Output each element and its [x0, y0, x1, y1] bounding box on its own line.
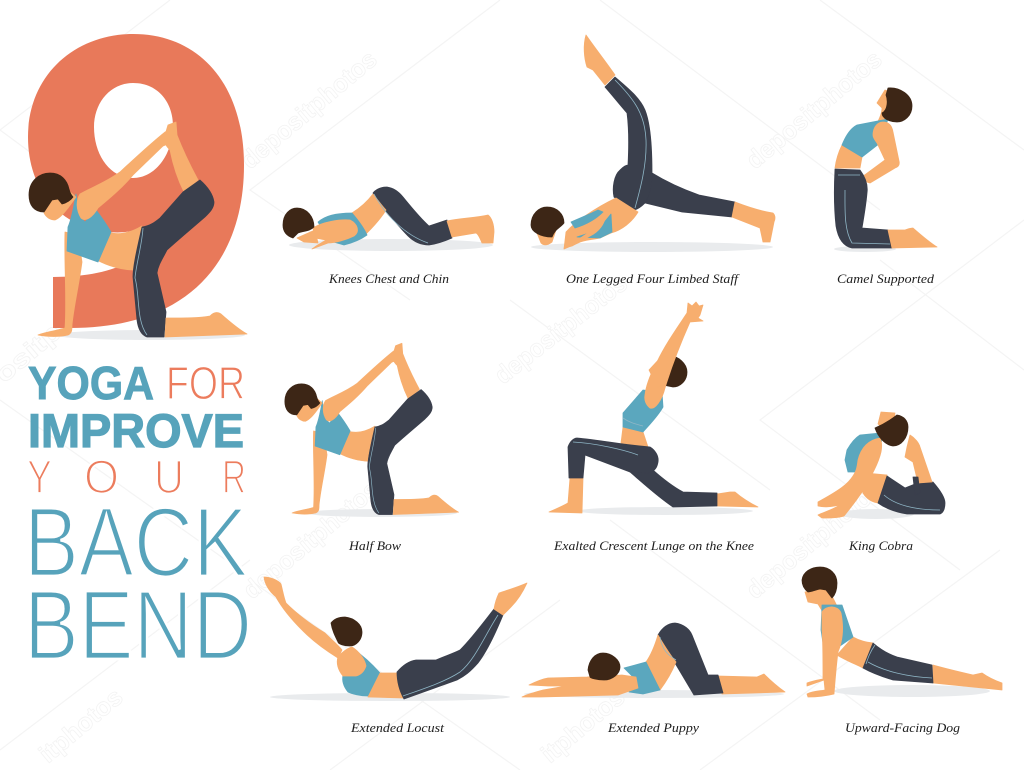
watermark text: depositphotos [489, 269, 633, 390]
pose: half bow [285, 343, 459, 517]
watermark text: depositphotos [236, 45, 383, 175]
pose: extended locust [264, 577, 527, 735]
title line: FOR: FOR [166, 357, 245, 409]
watermark text: itphotos [34, 683, 128, 769]
caption: half bow: Half Bow [348, 539, 402, 553]
watermark text: depositphotos [741, 475, 888, 605]
watermark text: depositphotos [741, 45, 888, 175]
pose: upward-facing dog [802, 567, 1002, 735]
caption: Camel Supported [837, 272, 935, 286]
title line: YOUR: O [84, 450, 119, 503]
title line: BEND: BEND [24, 570, 252, 680]
pose: knees chest and chin [283, 187, 494, 286]
pose: camel supported [834, 88, 937, 286]
title line: YOUR: U [154, 450, 184, 503]
watermark text: itphotos [536, 683, 630, 769]
pose: king cobra [818, 412, 945, 553]
pose: exalted crescent lunge on the knee [549, 302, 758, 553]
title line: YOUR: Y [27, 450, 52, 503]
big numeral 9 [28, 34, 244, 328]
caption: Extended Puppy [607, 721, 700, 735]
pose: extended puppy [522, 623, 785, 735]
caption: Exalted Crescent Lunge on the Knee [553, 539, 754, 553]
title line: IMPROVE: IMPROVE [28, 404, 244, 457]
pose: one legged four limbed staff [531, 35, 775, 286]
title line: YOUR [27, 450, 246, 503]
title [24, 357, 252, 680]
big figure: half bow pose [29, 122, 247, 340]
caption: King Cobra [848, 539, 913, 553]
watermark text: depositphotos [238, 475, 385, 605]
caption: One Legged Four Limbed Staff [566, 272, 740, 286]
caption: Extended Locust [350, 721, 445, 735]
title line: BACK: BACK [24, 487, 248, 597]
title line: YOUR: R [222, 450, 246, 503]
title line: YOGA: YOGA [28, 357, 154, 409]
caption: Knees Chest and Chin [328, 272, 449, 286]
caption: Upward-Facing Dog [845, 721, 960, 735]
